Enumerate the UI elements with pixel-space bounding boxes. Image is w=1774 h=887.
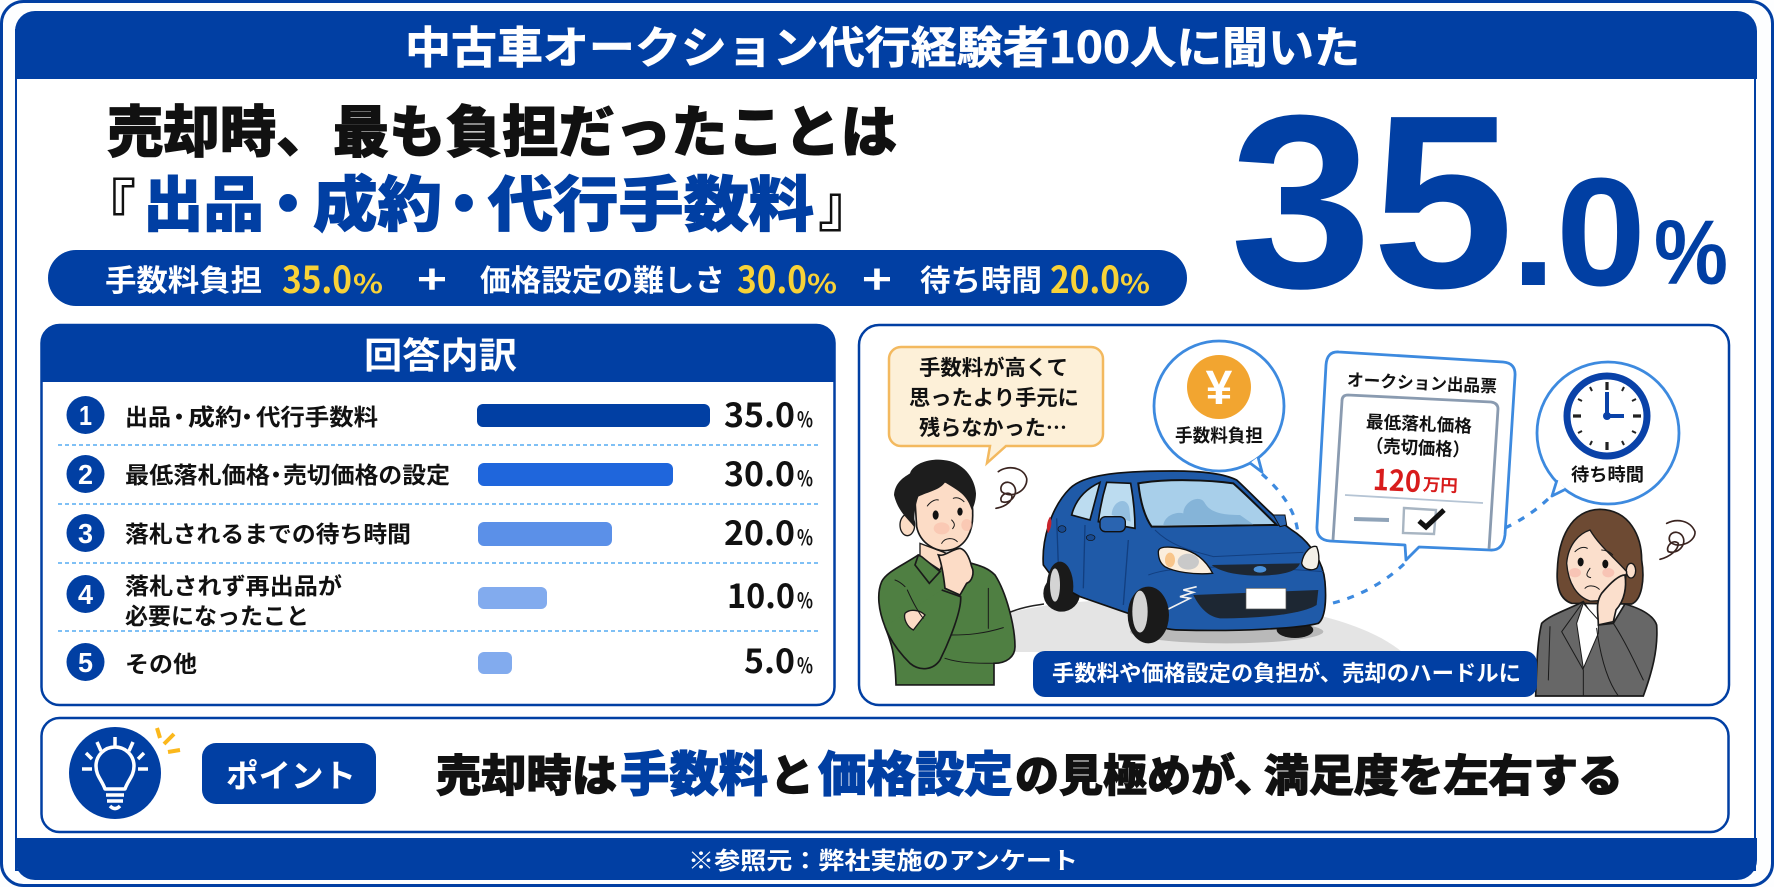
speech bubble (889, 347, 1103, 463)
summary pill: % (1120, 264, 1150, 301)
row 4: 落札されず再出品が (125, 567, 342, 601)
row 2: 売切価格の設定 (283, 456, 450, 490)
row 4: 10.0 (727, 570, 795, 618)
title bar (15, 11, 1757, 79)
caption banner (1033, 651, 1537, 697)
row 4: 必要になったこと (125, 597, 309, 631)
point badge: ポイント (226, 751, 356, 797)
point message: と (770, 740, 814, 804)
row 2: 2 (78, 459, 93, 490)
auction sheet callout: 最低落札価格 (1365, 409, 1473, 438)
row 2: % (797, 463, 813, 493)
headline line 2: 出品 (143, 157, 264, 244)
summary pill: + (417, 248, 447, 306)
row 3: % (797, 522, 813, 552)
caption banner: 手数料や価格設定の負担が、売却のハードルに (1052, 656, 1521, 688)
row 1: 35.0 (724, 389, 795, 437)
auction sheet callout: 万円 (1422, 470, 1458, 497)
headline line 2: 『 (79, 161, 136, 243)
panel: response breakdown (41, 324, 835, 705)
footer bar (15, 838, 1757, 880)
dashed connectors (1262, 474, 1553, 603)
row 1: 代行手数料 (256, 398, 378, 432)
row 1 (66, 389, 813, 437)
callout: fee burden: 手数料負担 (1175, 422, 1263, 448)
summary pill: 30.0 (737, 250, 807, 304)
row 3 (66, 507, 813, 555)
man (879, 460, 1027, 685)
title text: 中古車オークション代行経験者100人に聞いた (405, 12, 1360, 76)
headline line 2: 』 (818, 161, 875, 243)
row 4 (66, 567, 813, 631)
row 2: 最低落札価格 (125, 456, 270, 490)
auction sheet callout: 120 (1372, 457, 1422, 501)
headline (79, 88, 897, 244)
row 5: 5.0 (744, 635, 795, 683)
row 5 (66, 635, 813, 683)
big number 35.0% (1230, 64, 1728, 340)
point badge (202, 743, 376, 804)
panel heading: 回答内訳 (364, 327, 517, 379)
panel: illustration (859, 325, 1729, 705)
headline line 2: ・ (258, 157, 318, 244)
row 1: % (797, 404, 813, 434)
speech bubble: 残らなかった… (919, 412, 1067, 442)
row 5: その他 (125, 645, 197, 679)
headline line 2: ・ (434, 157, 494, 244)
headline line 2: 成約 (313, 157, 442, 244)
woman (1536, 509, 1695, 696)
point message: 売却時は (436, 740, 617, 804)
row 1: 1 (79, 400, 92, 431)
summary pill: 20.0 (1050, 250, 1120, 304)
row 1: 成約 (188, 398, 242, 432)
row 3: 3 (78, 518, 93, 549)
point message: の見極めが (1015, 740, 1235, 804)
row 5: % (797, 650, 813, 680)
row 5: 5 (78, 647, 93, 678)
icon: yen coin (1187, 355, 1251, 419)
summary pill: 待ち時間 (920, 256, 1042, 300)
point message: 価格設定 (818, 735, 1013, 805)
row 1: ・ (168, 398, 190, 432)
icon: clock (1567, 376, 1647, 456)
headline line 2: 代行手数料 (488, 157, 814, 244)
big number 35.0%: .0 (1511, 146, 1646, 318)
callout: fee burden: ¥ (1206, 362, 1233, 415)
big number 35.0%: 35 (1230, 64, 1514, 340)
point message (436, 735, 1623, 805)
summary pill: + (862, 248, 892, 306)
source note: ※参照元：弊社実施のアンケート (688, 841, 1078, 876)
speech bubble: 思ったより手元に (909, 382, 1079, 412)
big number 35.0%: % (1654, 202, 1728, 304)
auction sheet callout (1317, 352, 1515, 560)
row 3: 20.0 (724, 507, 795, 555)
auction sheet callout: オークション出品票 (1347, 366, 1498, 397)
row 4: 4 (78, 579, 93, 610)
summary pill (48, 248, 1187, 306)
row 1: ・ (236, 398, 258, 432)
panel header (41, 324, 835, 382)
summary pill: % (353, 264, 383, 301)
summary pill: 35.0 (282, 250, 352, 304)
panel: point (42, 718, 1728, 832)
callout: fee burden (1154, 341, 1284, 472)
point message: 、 (1234, 740, 1278, 804)
row 2 (66, 448, 813, 496)
summary pill: % (807, 264, 837, 301)
callout: waiting time (1537, 362, 1679, 504)
car (1043, 471, 1326, 643)
row 4: % (797, 585, 813, 615)
row 3: 落札されるまでの待ち時間 (125, 515, 411, 549)
auction sheet callout: （売切価格） (1365, 432, 1471, 462)
point message: 手数料 (620, 735, 768, 805)
headline line 1: 売却時、最も負担だったことは (107, 88, 897, 169)
point message: 満足度を左右する (1264, 740, 1623, 804)
row 2: 30.0 (724, 448, 795, 496)
callout: waiting time: 待ち時間 (1571, 461, 1644, 487)
headline line 2 (79, 157, 875, 244)
summary pill: 手数料負担 (105, 256, 262, 300)
row 1: 出品 (125, 398, 171, 432)
ground (1008, 599, 1402, 652)
speech bubble: 手数料が高くて (919, 352, 1068, 382)
row 2: ・ (264, 456, 288, 490)
icon: light bulb (69, 727, 180, 819)
summary pill: 価格設定の難しさ (480, 256, 725, 300)
